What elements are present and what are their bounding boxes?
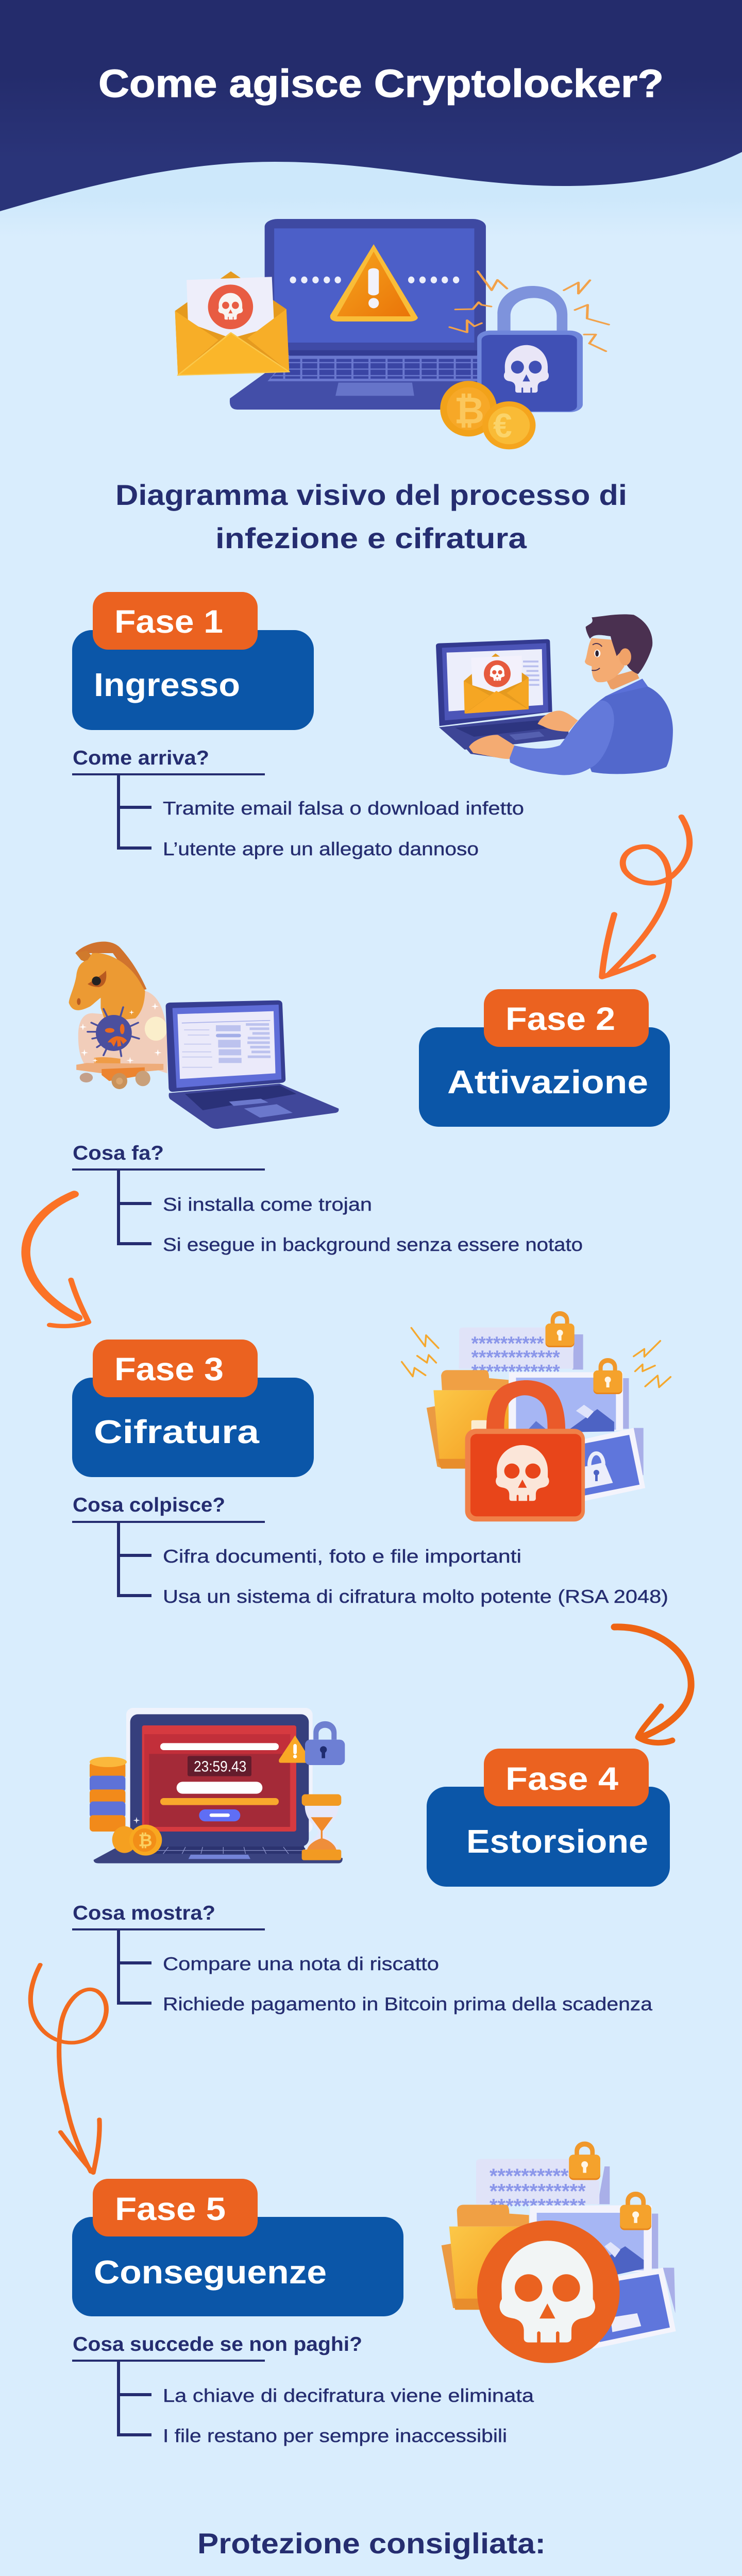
label box: Ingresso <box>72 630 314 730</box>
question: Come arriva? <box>73 747 209 769</box>
panel: fase 4: Fase 4 <box>505 1761 618 1797</box>
illustration: ransom screen laptop: ₿ <box>138 1831 152 1850</box>
bullet list: La chiave di decifratura viene eliminata <box>163 2385 534 2406</box>
header band <box>0 0 742 237</box>
warning triangle <box>290 244 459 321</box>
illustration: locked files with skull: ************ <box>490 2194 586 2217</box>
illustration: man at laptop <box>436 614 673 775</box>
panel: fase 3 <box>72 1340 668 1607</box>
title: Come agisce Cryptolocker? <box>98 62 664 106</box>
bullet list: Cifra documenti, foto e file importanti <box>163 1546 521 1567</box>
arrow: fase 4 to fase 5 <box>30 1964 106 2173</box>
coins: € <box>493 406 512 444</box>
tag: Fase 1 <box>93 592 258 650</box>
laptop <box>230 219 486 410</box>
question: Cosa mostra? <box>73 1902 215 1924</box>
countdown timer: 23:59.43 <box>194 1758 246 1775</box>
section heading: diagram: Diagramma visivo del processo di <box>115 479 627 511</box>
tag: Fase 3 <box>93 1340 258 1397</box>
illustration: locked files with red padlock: ********** <box>471 1333 544 1354</box>
panel: fase 4: Richiede pagamento in Bitcoin prima della scadenza <box>163 1993 653 2014</box>
illustration: locked files with skull: ************ <box>490 2179 586 2202</box>
arrow: fase 2 to fase 3 <box>26 1194 89 1326</box>
question: Cosa colpisce? <box>73 1494 225 1516</box>
tag: Fase 4 <box>484 1749 649 1806</box>
coins <box>440 381 535 449</box>
panel: fase 2: Fase 2 <box>505 1001 615 1037</box>
panel: fase 3: Usa un sistema di cifratura molto potente (RSA 2048) <box>163 1586 668 1607</box>
section heading: diagram: infezione e cifratura <box>215 522 527 554</box>
panel: fase 5: Conseguenze <box>94 2253 327 2291</box>
tag: Fase 2 <box>484 989 649 1047</box>
panel: fase 2: Si esegue in background senza essere notato <box>163 1234 583 1255</box>
panel: fase 4: Estorsione <box>466 1823 648 1860</box>
illustration: locked files with skull: ********** <box>490 2164 568 2188</box>
heading: protezione consigliata: Protezione consigliata: <box>197 2527 546 2560</box>
bullet list: Compare una nota di riscatto <box>163 1953 439 1974</box>
panel: fase 5: I file restano per sempre inaccessibili <box>163 2425 507 2446</box>
panel: fase 1: Ingresso <box>94 666 240 703</box>
label box: Estorsione <box>427 1787 670 1887</box>
padlock with skull <box>477 286 583 412</box>
illustration: trojan horse and laptop <box>69 942 339 1129</box>
coins: ₿ <box>454 391 484 432</box>
question: Cosa succede se non paghi? <box>73 2333 362 2355</box>
panel: fase 5 <box>72 2179 534 2446</box>
illustration: locked files with skull <box>442 2142 676 2363</box>
label box: Attivazione <box>419 1027 670 1127</box>
envelope with skull <box>175 272 289 375</box>
panel: fase 1 <box>72 592 524 859</box>
bullet list: Si installa come trojan <box>163 1194 372 1215</box>
section heading: diagram <box>115 479 627 554</box>
panel: fase 2: Attivazione <box>447 1063 648 1100</box>
sparks <box>450 272 609 351</box>
panel: fase 3: Fase 3 <box>114 1351 224 1387</box>
illustration: ransom screen laptop <box>90 1708 345 1863</box>
bullet list: Tramite email falsa o download infetto <box>163 798 524 819</box>
tag: Fase 5 <box>93 2179 258 2236</box>
illustration: locked files with red padlock: ************ <box>471 1361 560 1383</box>
panel: fase 3: Cifratura <box>94 1413 259 1450</box>
panel: fase 4 <box>72 1749 670 2014</box>
panel: fase 1: L’utente apre un allegato dannoso <box>163 838 479 859</box>
arrow: fase 1 to fase 2 <box>602 817 689 977</box>
panel: fase 1: Fase 1 <box>114 604 223 640</box>
panel: fase 5: Fase 5 <box>115 2191 226 2227</box>
arrow: fase 3 to fase 4 <box>614 1627 691 1743</box>
label box: Cifratura <box>72 1378 314 1477</box>
illustration: locked files with red padlock: ************ <box>471 1347 560 1369</box>
panel: fase 2 <box>72 989 670 1255</box>
label box: Conseguenze <box>72 2217 403 2316</box>
illustration: locked files with red padlock <box>402 1311 670 1521</box>
question: Cosa fa? <box>73 1142 164 1164</box>
hero illustration: laptop, envelope, padlock and coins <box>175 219 609 449</box>
